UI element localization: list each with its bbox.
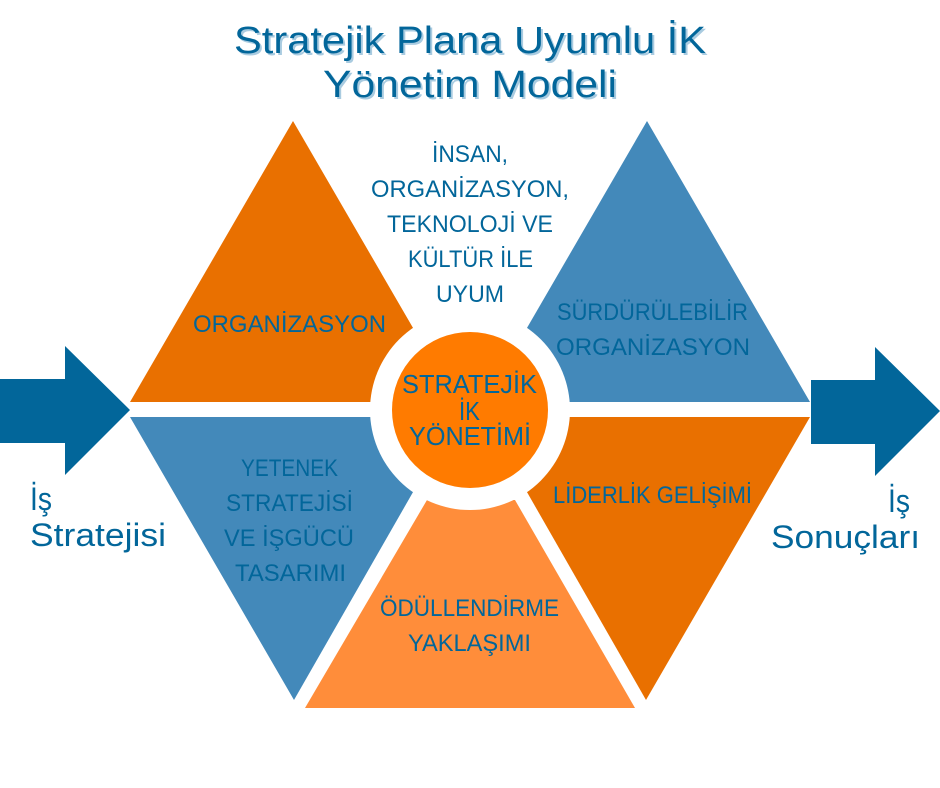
label: sürdürülebilir organizasyon: SÜRDÜRÜLEBİLİR bbox=[557, 299, 748, 326]
label: sürdürülebilir organizasyon: ORGANİZASYON bbox=[556, 334, 750, 361]
label: yetenek stratejisi ve işgücü tasarımı: TASARIMI bbox=[235, 560, 346, 587]
middle text: uyum: ORGANİZASYON, bbox=[371, 176, 569, 203]
center circle bbox=[392, 332, 548, 488]
label: liderlik gelişimi: LİDERLİK GELİŞİMİ bbox=[553, 482, 752, 509]
arrow: right output bbox=[811, 347, 940, 476]
middle text: uyum: KÜLTÜR İLE bbox=[408, 246, 533, 273]
label: ödüllendirme yaklaşımı: ÖDÜLLENDİRME bbox=[380, 595, 559, 622]
label: yetenek stratejisi ve işgücü tasarımı: VE İŞGÜCÜ bbox=[224, 525, 354, 552]
label: ödüllendirme yaklaşımı: YAKLAŞIMI bbox=[408, 630, 531, 657]
label: iş stratejisi: İş bbox=[30, 481, 52, 517]
center label: YÖNETİMİ bbox=[409, 421, 531, 451]
title bbox=[234, 19, 706, 106]
label: iş stratejisi bbox=[30, 481, 166, 553]
center label: İK bbox=[459, 396, 481, 426]
label: yetenek stratejisi ve işgücü tasarımı: STRATEJİSİ bbox=[226, 490, 353, 517]
middle text: uyum: İNSAN, bbox=[432, 141, 508, 168]
trapezoid: ödüllendirme bbox=[305, 500, 635, 708]
label: iş stratejisi: Stratejisi bbox=[30, 517, 166, 553]
triangle: liderlik gelişimi bbox=[484, 417, 810, 700]
label: iş sonuçları bbox=[771, 483, 920, 555]
middle text: uyum: TEKNOLOJİ VE bbox=[387, 211, 553, 238]
center label: STRATEJİK bbox=[402, 369, 538, 399]
label: iş sonuçları: İş bbox=[888, 483, 910, 519]
triangle: sürdürülebilir organizasyon bbox=[484, 121, 810, 402]
center label bbox=[402, 369, 538, 451]
title: Stratejik Plana Uyumlu İK bbox=[234, 19, 706, 62]
triangle: organizasyon bbox=[130, 121, 456, 402]
label: yetenek stratejisi ve işgücü tasarımı bbox=[224, 455, 354, 587]
title: Yönetim Modeli bbox=[323, 64, 617, 106]
label: iş sonuçları: Sonuçları bbox=[771, 519, 920, 555]
middle text: uyum: UYUM bbox=[436, 281, 504, 308]
triangle: yetenek stratejisi bbox=[130, 417, 456, 700]
label: organizasyon: ORGANİZASYON bbox=[193, 311, 386, 338]
arrow: left input bbox=[0, 346, 130, 475]
label: ödüllendirme yaklaşımı bbox=[380, 595, 559, 657]
label: yetenek stratejisi ve işgücü tasarımı: YETENEK bbox=[241, 455, 339, 482]
label: sürdürülebilir organizasyon bbox=[556, 299, 750, 361]
white ring bbox=[370, 310, 570, 510]
middle text: uyum bbox=[371, 141, 569, 308]
